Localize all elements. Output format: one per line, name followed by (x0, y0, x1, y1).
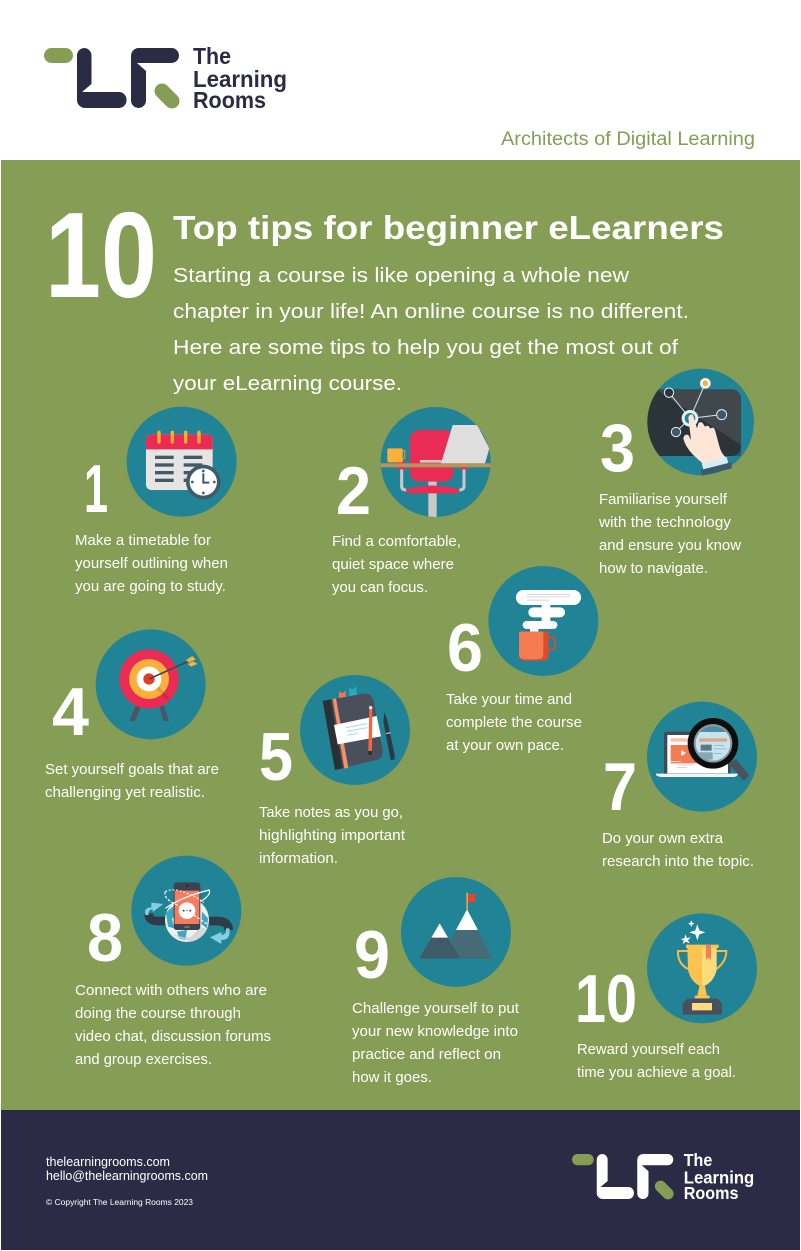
tip 10 text (577, 1042, 736, 1081)
logo wordmark: Rooms (193, 87, 266, 113)
logo mark (44, 48, 179, 108)
header logo (44, 43, 287, 113)
number 2: 2 (336, 453, 371, 529)
tip 1 text (75, 533, 228, 595)
tip 3 text: how to navigate. (599, 561, 708, 577)
intro text: your eLearning course. (173, 373, 402, 395)
tip 1 (75, 407, 237, 595)
footer logo: The (684, 1150, 712, 1170)
tip 1 text: you are going to study. (75, 579, 226, 595)
tip 8 (75, 856, 271, 1068)
icon: phone, globe and arrows (131, 856, 241, 966)
tip 6 (446, 566, 598, 754)
tip 3 text: and ensure you know (599, 538, 742, 554)
tip 8 text: and group exercises. (75, 1052, 212, 1068)
number 8: 8 (87, 900, 123, 976)
icon: calendar and clock (127, 407, 237, 517)
tip 1 text: Make a timetable for (75, 533, 211, 549)
tip 4 text: Set yourself goals that are (45, 762, 219, 778)
tip 6 text (446, 692, 582, 754)
icon: laptop and magnifying glass (647, 702, 757, 812)
tip 9 text: practice and reflect on (352, 1047, 501, 1063)
tip 4 (45, 629, 219, 801)
tip 4 text (45, 762, 219, 801)
tip 6 text: at your own pace. (446, 738, 564, 754)
tip 9 text: how it goes. (352, 1070, 432, 1086)
heading: Top tips for beginner eLearners (173, 209, 724, 246)
tip 10 (575, 913, 757, 1081)
tip 8 text: doing the course through (75, 1006, 241, 1022)
icon: trophy (647, 913, 757, 1023)
icon: desk with chair and laptop (380, 407, 492, 518)
tip 5 text: information. (259, 851, 338, 867)
tip 2 text: you can focus. (332, 580, 428, 596)
tip 7 text: Do your own extra (602, 831, 724, 847)
tip 5 (259, 675, 410, 867)
icon: hand on touch screen (642, 369, 754, 476)
intro text: Starting a course is like opening a whole new (173, 265, 630, 287)
tip 4 text: challenging yet realistic. (45, 785, 205, 801)
number 1: 1 (84, 451, 108, 527)
number 6: 6 (447, 610, 483, 686)
icon: mountains with flag (401, 877, 511, 987)
number 10: 10 (575, 961, 637, 1037)
tip 3 (598, 369, 754, 577)
tip 10 text: Reward yourself each (577, 1042, 720, 1058)
tip 2 text (332, 534, 461, 596)
logo wordmark (193, 43, 287, 113)
logo wordmark: The (193, 43, 231, 69)
icon: target with arrow (96, 629, 206, 739)
tip 6 text: complete the course (446, 715, 582, 731)
intro text: Here are some tips to help you get the most out of (173, 337, 679, 359)
number 3: 3 (600, 410, 635, 486)
tip 9 text (352, 1001, 519, 1086)
footer contact details: hello@thelearningrooms.com (46, 1169, 208, 1183)
tip 2 text: quiet space where (332, 557, 454, 573)
footer logo: Learning (684, 1167, 754, 1187)
tip 8 text: video chat, discussion forums (75, 1029, 271, 1045)
tip 5 text: Take notes as you go, (259, 805, 403, 821)
number 5: 5 (259, 719, 293, 795)
footer contact details (46, 1155, 208, 1207)
intro text (173, 265, 689, 395)
number 9: 9 (354, 917, 390, 993)
tip 2 text: Find a comfortable, (332, 534, 461, 550)
tip 1 text: yourself outlining when (75, 556, 228, 572)
tip 3 text: with the technology (598, 515, 732, 531)
tip 3 text: Familiarise yourself (599, 492, 728, 508)
footer contact details: thelearningrooms.com (46, 1155, 170, 1169)
tip 5 text (259, 805, 405, 867)
number 4: 4 (52, 674, 89, 750)
footer contact details: © Copyright The Learning Rooms 2023 (46, 1198, 194, 1207)
big number 10: 10 (45, 187, 157, 323)
footer logo: Rooms (684, 1183, 738, 1203)
tip 6 text: Take your time and (446, 692, 572, 708)
footer logo (572, 1150, 754, 1203)
panel: footer (1, 1110, 800, 1250)
tip 2 (332, 407, 492, 596)
intro text: chapter in your life! An online course is no different. (173, 301, 689, 323)
tip 5 text: highlighting important (259, 828, 405, 844)
icon: notebook and pen (300, 675, 410, 785)
tip 7 text: research into the topic. (602, 854, 754, 870)
tip 9 text: your new knowledge into (352, 1024, 518, 1040)
tip 9 text: Challenge yourself to put (352, 1001, 519, 1017)
number 7: 7 (603, 749, 637, 825)
logo wordmark: Learning (193, 66, 287, 92)
tip 9 (352, 877, 519, 1086)
tip 7 (602, 702, 757, 870)
tagline: Architects of Digital Learning (501, 129, 755, 150)
tip 3 text (598, 492, 742, 577)
tip 8 text (75, 983, 271, 1068)
tip 10 text: time you achieve a goal. (577, 1065, 736, 1081)
icon: steaming mug (488, 566, 598, 676)
tip 8 text: Connect with others who are (75, 983, 267, 999)
panel: green main area (1, 160, 800, 1110)
tip 7 text (602, 831, 754, 870)
